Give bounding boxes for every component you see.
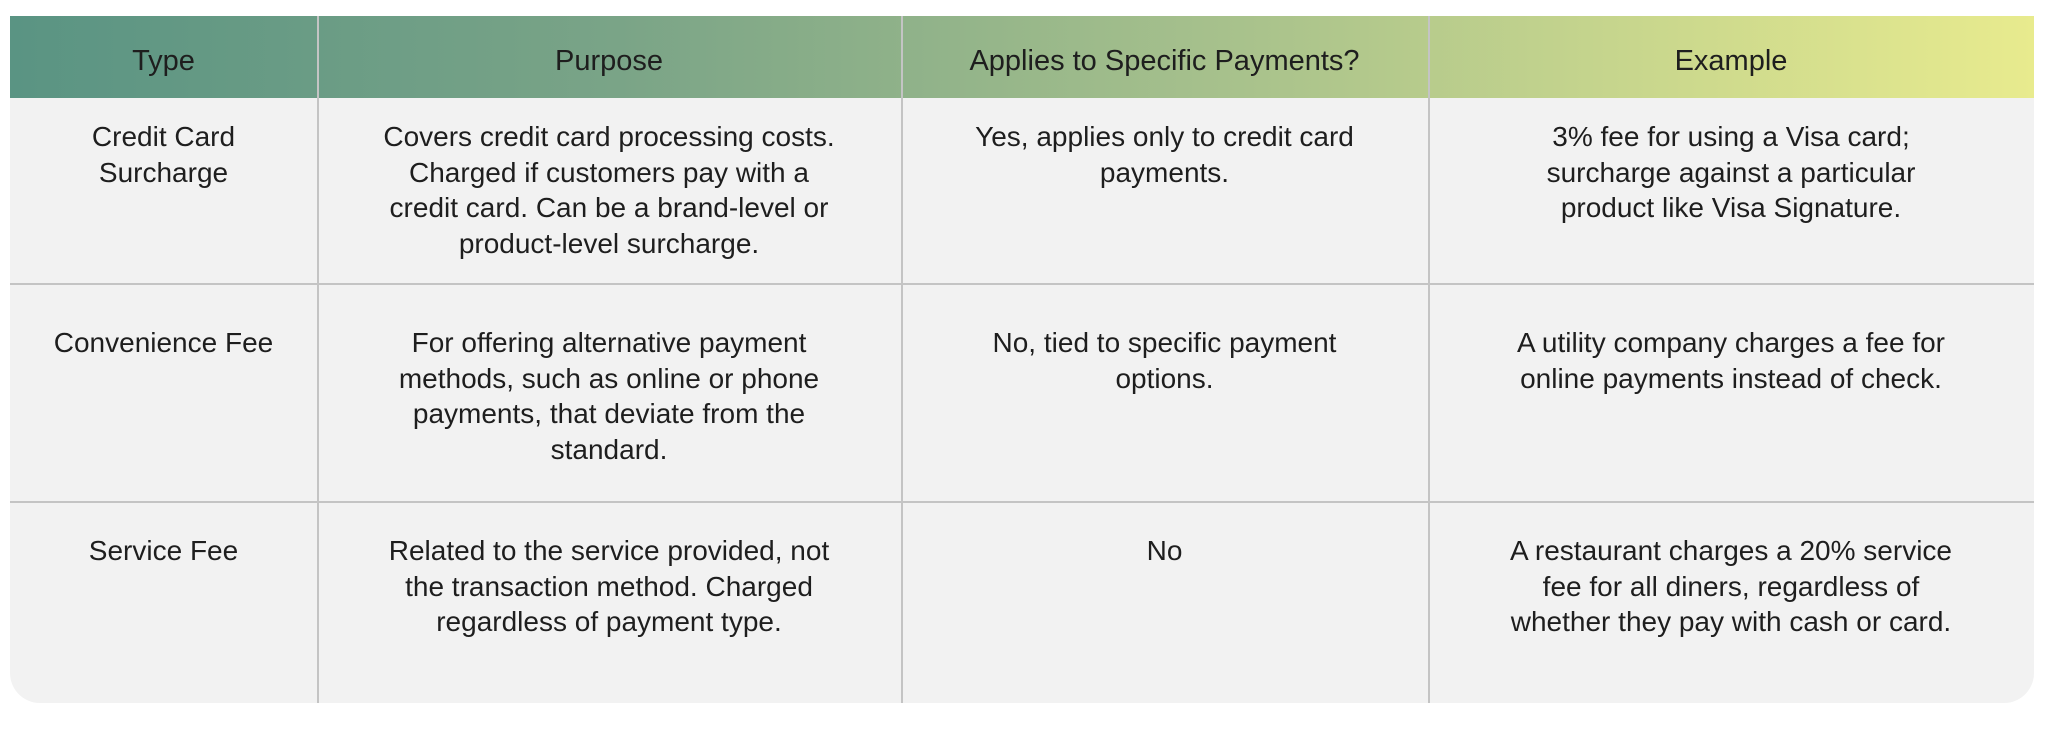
row 1 example: 3% fee for using a Visa card;	[1552, 121, 1910, 152]
row 2 purpose	[399, 327, 819, 464]
row 2 purpose: standard.	[551, 434, 667, 464]
row 1: Credit Card Surcharge: Credit Card	[92, 121, 235, 152]
row 2 example	[1517, 327, 1945, 394]
row 3 applies: No	[1147, 535, 1182, 566]
header row	[10, 16, 2034, 98]
row 3 purpose: regardless of payment type.	[436, 606, 782, 637]
row 1 example: surcharge against a particular	[1547, 156, 1915, 188]
row 1 example	[1547, 121, 1915, 223]
row 2 example: A utility company charges a fee for	[1517, 327, 1945, 358]
header: Example: Example	[1675, 45, 1787, 77]
row 3 purpose: Related to the service provided, not	[389, 535, 829, 566]
row 2 applies	[993, 327, 1336, 394]
row 2 applies: No, tied to specific payment	[993, 327, 1336, 358]
row 2 example: online payments instead of check.	[1520, 362, 1942, 394]
header: Purpose: Purpose	[555, 45, 663, 77]
row 1 applies	[975, 121, 1354, 188]
row 1 purpose	[383, 121, 835, 259]
row 1 purpose: credit card. Can be a brand-level or	[390, 192, 828, 223]
row 3 purpose: the transaction method. Charged	[405, 570, 813, 602]
header: Applies: Applies to Specific Payments?	[969, 45, 1360, 77]
row 1 purpose: Covers credit card processing costs.	[383, 121, 835, 152]
row 1 applies: Yes, applies only to credit card	[975, 121, 1354, 152]
row 2 purpose: methods, such as online or phone	[399, 362, 819, 394]
row 3 purpose	[389, 535, 830, 637]
row 3 example: whether they pay with cash or card.	[1511, 606, 1951, 637]
row 1 example: product like Visa Signature.	[1561, 192, 1901, 223]
row 1: Credit Card Surcharge: Surcharge	[99, 156, 228, 188]
row 2 applies: options.	[1115, 362, 1214, 394]
header: Type: Type	[132, 45, 195, 77]
row 3 example: A restaurant charges a 20% service	[1510, 535, 1952, 566]
row 2 purpose: payments, that deviate from the	[413, 398, 805, 429]
row 1: Credit Card Surcharge	[92, 121, 235, 188]
row 1 applies: payments.	[1100, 156, 1229, 188]
row 2 purpose: For offering alternative payment	[412, 327, 806, 358]
row 3: Service Fee: Service Fee	[89, 535, 238, 566]
row 3 example: fee for all diners, regardless of	[1543, 570, 1919, 602]
row 1 purpose: Charged if customers pay with a	[409, 156, 809, 188]
row 1 purpose: product-level surcharge.	[459, 228, 759, 258]
row 2: Convenience Fee: Convenience Fee	[54, 327, 273, 358]
row 3 example	[1510, 535, 1952, 637]
